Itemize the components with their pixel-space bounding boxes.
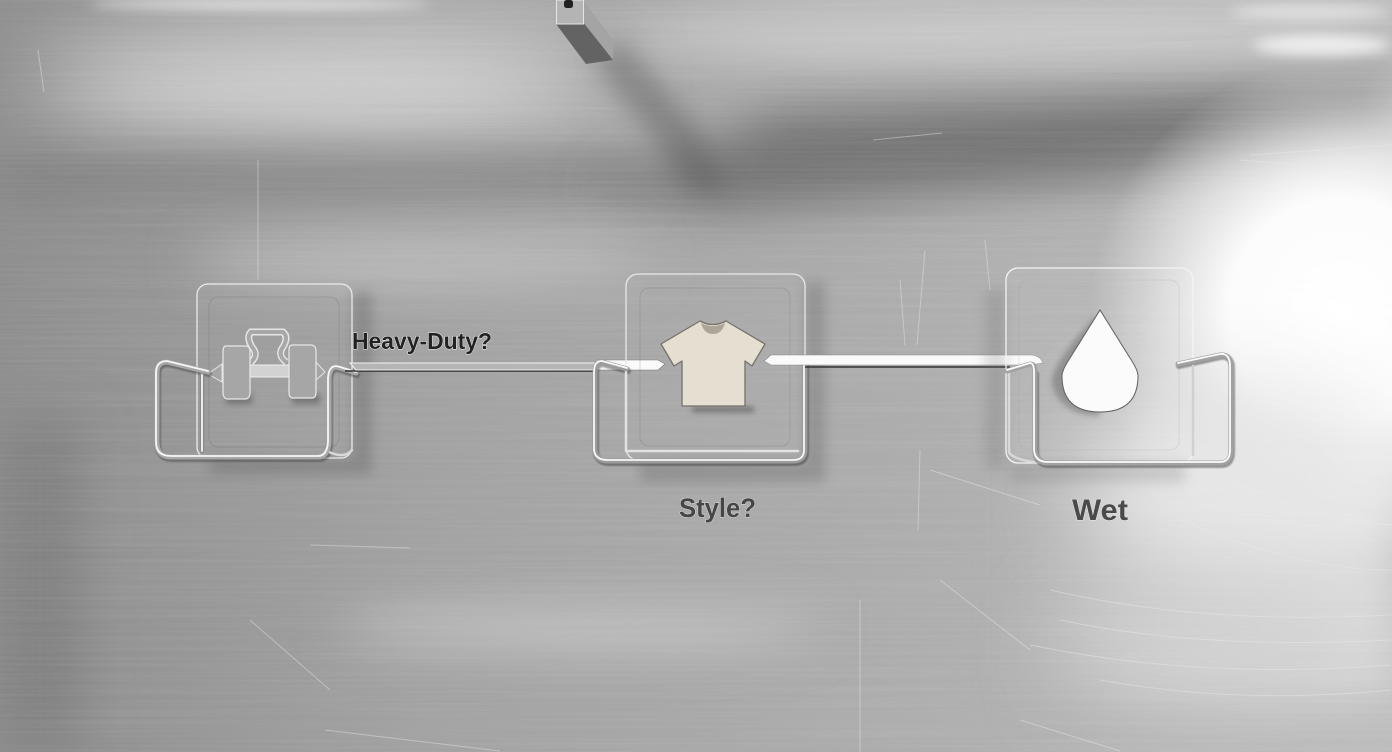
panel: wet [985,268,1232,527]
wire basket [594,360,806,463]
glass plate [1006,268,1193,463]
glass plate [197,284,352,458]
heading: Style?: Style? [679,493,756,523]
icon: t-shirt [661,321,765,412]
wall bracket at the top [556,0,730,195]
heading: Wet: Wet [1072,494,1128,527]
icon: dumbbell [208,332,325,404]
panel: heavy-duty [156,284,492,474]
wire basket [1007,354,1232,465]
plate shadow [210,292,372,474]
icon: water drop [1052,310,1138,416]
connector arrow: style to wet [764,355,1043,367]
plate shadow [985,290,1185,482]
wire basket [156,361,357,459]
heading: Heavy-Duty?: Heavy-Duty? [352,328,492,354]
connector arrow: heavy-duty to style [345,360,665,371]
glass plate [626,274,805,460]
plate shadow [640,282,825,482]
panel: style [594,274,825,523]
icon: bracket keyhole [564,0,573,8]
